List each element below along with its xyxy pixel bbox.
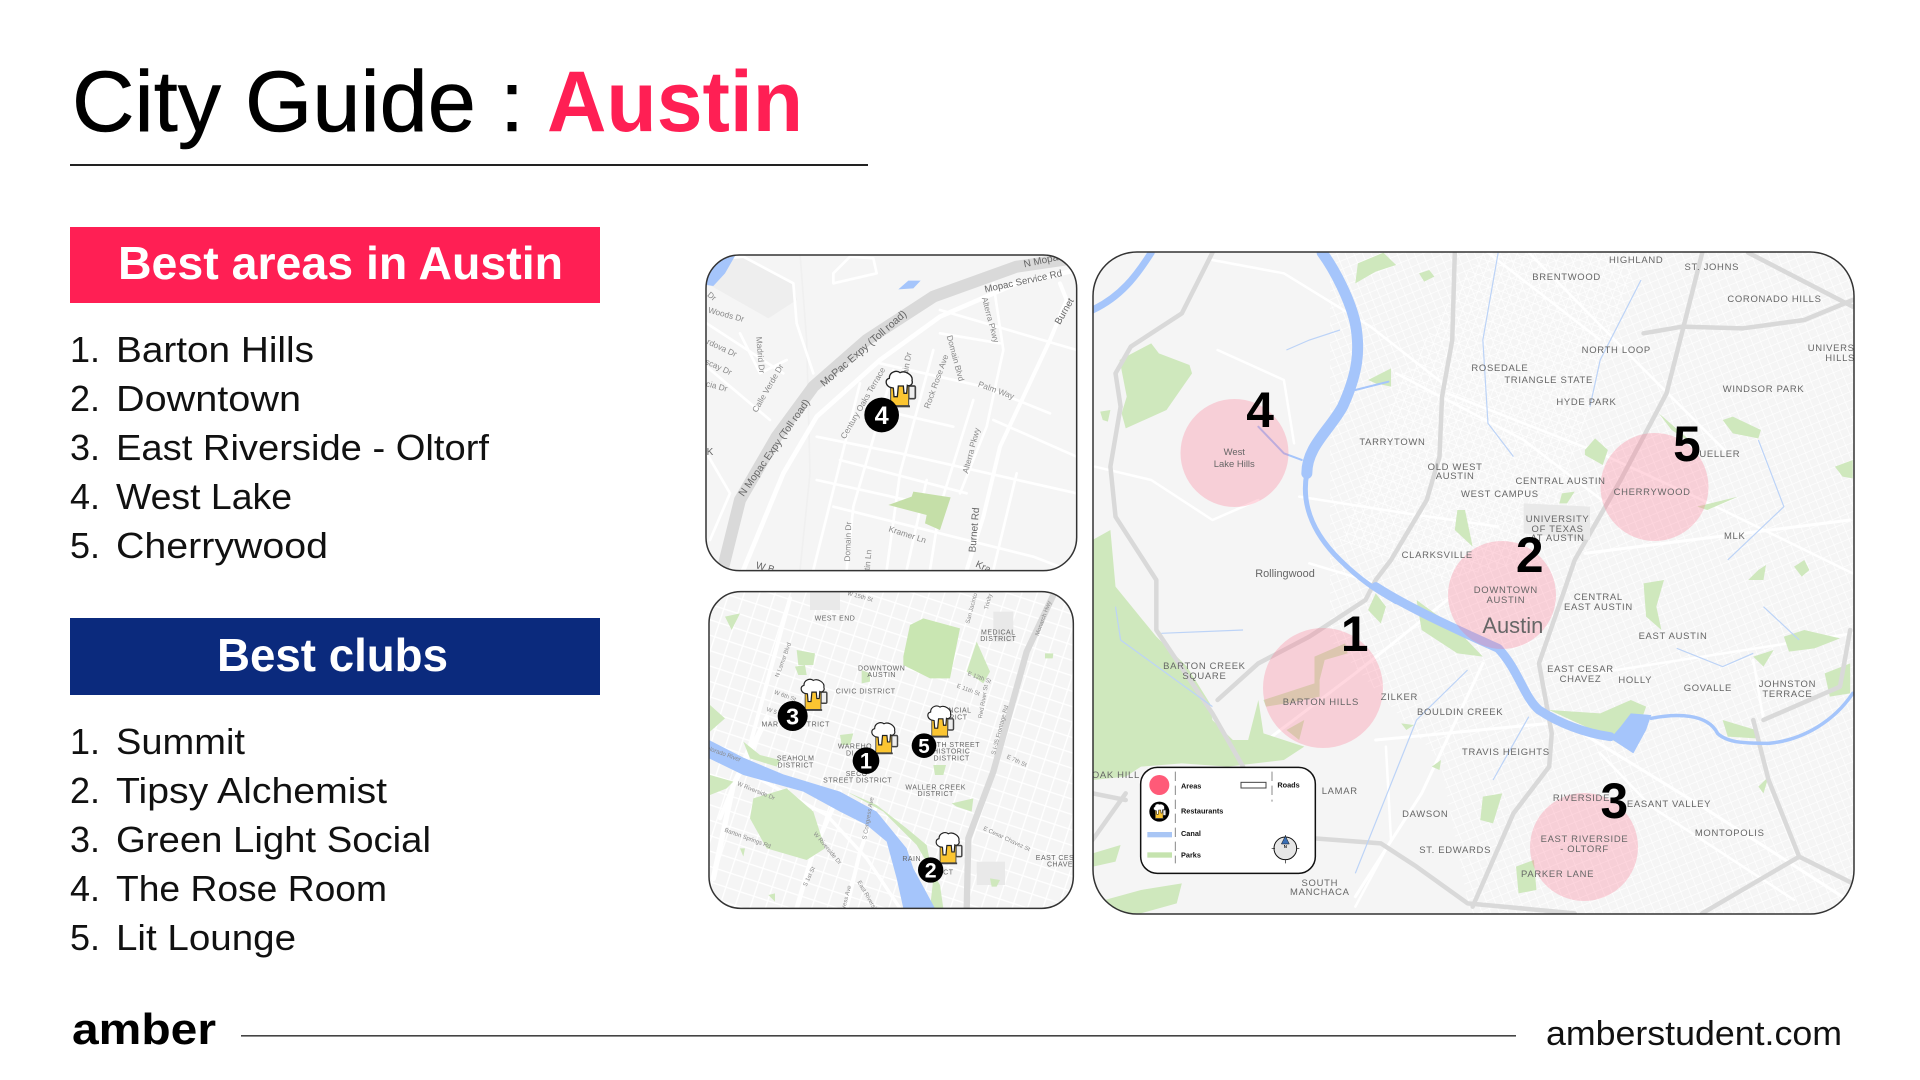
panel: map of downtown clubs: W 15th St (846, 591, 874, 604)
panel: map of downtown clubs: WALLER CREEK (905, 784, 966, 791)
area: Barton Hills (1263, 628, 1383, 748)
legend: areas: Areas (1181, 781, 1201, 790)
panel: map of downtown clubs: WEST END (815, 616, 855, 623)
panel: map of West Lake club: ain Dr (900, 351, 914, 375)
map labels: UNIVERSITY (1526, 514, 1589, 525)
panel: map of downtown clubs: SEAHOLM (777, 756, 814, 763)
panel: map of West Lake club: Century Oaks Terrace (838, 365, 887, 441)
panel: map of downtown clubs: TH STREET (937, 742, 980, 749)
panel: map of West Lake club: Woods Dr (707, 305, 745, 324)
panel: map of downtown clubs: ress Ave (841, 884, 853, 909)
icon: compass (1272, 835, 1299, 863)
map labels: TARRYTOWN (1359, 437, 1426, 448)
map labels: ZILKER (1381, 692, 1418, 703)
panel: map of downtown clubs: W 5 (765, 707, 778, 716)
legend: parks: Parks (1181, 850, 1201, 859)
map labels: BOULDIN CREEK (1417, 707, 1503, 718)
area numbers: 3 (1600, 773, 1628, 829)
panel: map of West Lake club: Domain Dr (842, 521, 853, 562)
panel: map of downtown clubs: NCIAL (948, 708, 972, 715)
title (72, 54, 803, 150)
map labels: SOUTH (1302, 878, 1338, 889)
legend: canal: Canal (1181, 829, 1201, 838)
panel: map of downtown clubs: EAST CES (1036, 855, 1074, 862)
marker: club 5 (912, 733, 936, 758)
title: Austin (547, 54, 803, 150)
panel: map of West Lake club: MoPac Expy (Toll road) (818, 308, 909, 389)
map labels: BARTON HILLS (1283, 697, 1359, 708)
marker: club 1 (853, 747, 879, 774)
map labels: HYDE PARK (1556, 397, 1617, 408)
panel: map of West Lake club: Burnet Rd (967, 507, 982, 553)
list: best areas: 5. (70, 525, 100, 566)
icon: compass: N (1284, 844, 1287, 849)
panel: map of West Lake club: Domain Blvd (945, 334, 967, 383)
panel: map of downtown clubs: CT (943, 869, 954, 876)
marker: club 2: 2 (925, 859, 937, 883)
map labels: ROSEDALE (1471, 363, 1528, 374)
panel: map of West Lake club (704, 251, 1080, 576)
list: best areas: Barton Hills (116, 329, 314, 370)
map labels: MONTOPOLIS (1695, 828, 1765, 839)
list: best areas: East Riverside - Oltorf (116, 427, 490, 468)
panel: map of West Lake club: tin Ln (862, 549, 874, 571)
map labels: TERRACE (1762, 689, 1812, 700)
map labels: MLK (1724, 531, 1745, 542)
map labels: SQUARE (1182, 671, 1226, 682)
panel: map of downtown clubs: Colorado River (702, 744, 741, 764)
map labels: TRAVIS HEIGHTS (1462, 747, 1550, 758)
panel: map of West Lake club: Mopac Service Rd (984, 268, 1063, 295)
list: best clubs: 4. (70, 868, 100, 909)
legend: restaurants (1149, 802, 1223, 822)
list: best clubs: 2. (70, 770, 100, 811)
panel: map of West Lake club: cia Dr (705, 378, 729, 394)
list: best areas: 3. (70, 427, 100, 468)
area numbers: 4 (1246, 382, 1274, 438)
panel: map of downtown clubs: DISTRICT (778, 763, 814, 770)
area numbers: 2 (1516, 527, 1544, 583)
map labels: BARTON CREEK (1163, 661, 1246, 672)
icon: park (888, 492, 951, 530)
list: best clubs: The Rose Room (116, 868, 387, 909)
panel: map of West Lake club: Calle Verde Dr (750, 362, 786, 414)
panel: map of downtown clubs: S I-35 Frontage Rd (991, 705, 1010, 756)
map labels: EAST CESAR (1547, 664, 1614, 675)
marker: club 3: 3 (786, 703, 799, 729)
panel: map of West Lake club: Madrid Dr (754, 336, 767, 374)
list: best areas: Downtown (116, 378, 301, 419)
panel: map of downtown clubs: MAR (761, 722, 779, 729)
map labels: OAK HILL (1092, 770, 1140, 781)
panel: map of West Lake club: Dr (706, 289, 719, 303)
map labels: UNIVERS (1808, 343, 1855, 354)
map labels: LAMAR (1322, 786, 1358, 797)
area numbers: 5 (1673, 416, 1701, 472)
panel: map of downtown clubs: Trinity (984, 593, 994, 610)
panel: map of downtown clubs: AUSTIN (867, 672, 896, 679)
map labels: DOWNTOWN (1474, 585, 1538, 596)
map labels: OF TEXAS (1532, 524, 1584, 535)
map labels: OLD WEST (1428, 462, 1483, 473)
map labels: Rollingwood (1255, 568, 1315, 580)
list: best clubs: 3. (70, 819, 100, 860)
panel: map of West Lake club: Burnet (1053, 296, 1077, 327)
list: best areas: Cherrywood (116, 525, 328, 566)
map labels: EAST RIVERSIDE (1541, 834, 1628, 845)
map labels: HOLLY (1618, 675, 1652, 686)
heading: best areas (70, 227, 600, 303)
map labels: West (1224, 447, 1245, 458)
panel: map of downtown clubs: W 6th St (773, 690, 797, 703)
title: City Guide : (72, 54, 524, 150)
map labels (1092, 255, 1855, 898)
list: best clubs: Tipsy Alchemist (116, 770, 387, 811)
list: best clubs: Green Light Social (116, 819, 431, 860)
panel: map of downtown clubs: W Riverside Dr (736, 781, 776, 802)
marker: club 1: 1 (860, 749, 872, 774)
marker: club 3 (778, 701, 808, 731)
map labels: WINDSOR PARK (1723, 384, 1804, 395)
panel: map of downtown clubs: Red River St (978, 684, 990, 719)
footer url: amberstudent.com (1546, 1015, 1842, 1053)
map labels: ST. EDWARDS (1419, 845, 1491, 856)
panel: map of West Lake club: N Mopac Expy (Toll road) (737, 398, 813, 499)
panel: map of West Lake club: Alterra Pkwy (960, 426, 982, 474)
icon: beer mug 2 (936, 833, 962, 864)
panel: map of downtown clubs: W Riverside Dr (812, 831, 842, 866)
panel: map of downtown clubs: DISTRICT (918, 791, 954, 798)
marker: club 5: 5 (918, 735, 930, 758)
map labels: CENTRAL (1574, 592, 1623, 603)
panel: map of downtown clubs: DI (846, 751, 854, 758)
area numbers: 1 (1341, 606, 1368, 662)
footer brand: amber (72, 1005, 216, 1054)
panel: map of downtown clubs: TRICT (807, 722, 830, 729)
heading: best clubs: Best clubs (217, 629, 448, 681)
map labels: EASANT VALLEY (1627, 799, 1711, 810)
map labels: TRIANGLE STATE (1504, 375, 1593, 386)
map labels: - OLTORF (1560, 844, 1609, 855)
panel: map of downtown clubs: STREET DISTRICT (823, 778, 892, 785)
map labels: HILLS (1825, 353, 1855, 364)
map labels: CENTRAL AUSTIN (1515, 476, 1606, 487)
map labels: JOHNSTON (1759, 679, 1816, 690)
panel: map of West Lake club: Alterra Pkwy (980, 296, 1002, 344)
map labels: MANCHACA (1290, 887, 1350, 898)
legend: areas (1149, 775, 1201, 795)
panel: map of downtown clubs: HISTORIC (933, 749, 970, 756)
panel: map of downtown clubs: Barton Springs Rd (723, 828, 771, 850)
marker: club 4 (864, 398, 899, 432)
panel: map of West Lake club: W B (755, 560, 776, 576)
list: best areas: West Lake (116, 476, 292, 517)
panel: map of downtown clubs: S 1st St (803, 866, 817, 888)
marker: club 2 (918, 857, 943, 883)
map labels: Austin (1482, 613, 1543, 638)
panel: map of downtown clubs (702, 591, 1074, 911)
panel: map of West Lake club: Kramer Ln (887, 524, 928, 545)
area: Downtown Austin (1448, 541, 1556, 649)
list: best clubs: 1. (70, 721, 100, 762)
marker: club 4: 4 (875, 402, 889, 430)
area: West Lake Hills (1180, 399, 1288, 507)
map labels: Lake Hills (1214, 459, 1255, 470)
heading: best areas: Best areas in Austin (118, 237, 563, 289)
map labels: EAST AUSTIN (1564, 602, 1633, 613)
map labels: AUSTIN (1486, 595, 1525, 606)
panel: map of downtown clubs: SECO (846, 771, 868, 778)
legend: canal (1147, 829, 1201, 838)
panel: map of downtown clubs: MEDICAL (981, 629, 1016, 636)
panel: map of downtown clubs: DISTRICT (934, 756, 970, 763)
panel: map of West Lake club: N Mopac (1023, 251, 1064, 270)
panel: map of West Lake club: Palm Way (977, 379, 1016, 401)
panel: map of downtown clubs: N Lamar Blvd (775, 642, 793, 678)
area numbers (1246, 382, 1701, 829)
panel: map of West Lake club: K (707, 447, 714, 458)
panel: map of downtown clubs: S Congress Ave (862, 796, 876, 840)
icon: beer mug 5 (928, 706, 953, 738)
map labels: GOVALLE (1684, 683, 1732, 694)
panel: map of West Lake club: scay Dr (704, 356, 734, 377)
list: best clubs: 5. (70, 917, 100, 958)
list: best clubs: Lit Lounge (116, 917, 296, 958)
map labels: NORTH LOOP (1582, 345, 1651, 356)
panel: map of downtown clubs: E 7th St (1005, 754, 1028, 769)
panel: map of downtown clubs: San Jacinto (965, 592, 979, 624)
panel: map of downtown clubs: E 11th St (956, 684, 981, 698)
legend: roads: Roads (1277, 781, 1300, 790)
list: best areas: 2. (70, 378, 100, 419)
panel: main Austin areas map (1092, 252, 1855, 914)
map labels: PARKER LANE (1521, 869, 1594, 880)
list: best clubs: Summit (116, 721, 245, 762)
panel: map of downtown clubs: RICT (949, 715, 968, 722)
icon: beer mug 1 (872, 723, 897, 754)
map labels: EAST AUSTIN (1639, 631, 1707, 642)
legend: roads (1241, 781, 1300, 790)
list: best areas: 4. (70, 476, 100, 517)
area: East Riverside - Oltorf (1530, 793, 1638, 901)
map labels: AT AUSTIN (1531, 533, 1585, 544)
map labels: CHERRYWOOD (1614, 487, 1691, 498)
panel: map of West Lake club: rdova Dr (705, 336, 739, 359)
map labels: AUSTIN (1436, 471, 1475, 482)
panel: map of West Lake club: Rock Rose Ave (922, 353, 951, 410)
panel: map of downtown clubs: DOWNTOWN (858, 665, 905, 672)
icon: beer mug 4 (886, 371, 915, 407)
panel: map of downtown clubs: Monarch Hwy (1035, 600, 1053, 637)
map labels: WEST CAMPUS (1461, 489, 1539, 500)
map labels: DAWSON (1402, 809, 1448, 820)
map labels: CHAVEZ (1560, 674, 1601, 685)
map labels: BRENTWOOD (1532, 272, 1601, 283)
panel: map of downtown clubs: CHAVE (1047, 862, 1073, 869)
legend (1141, 767, 1315, 873)
list: best areas (70, 329, 490, 566)
legend: parks (1147, 850, 1201, 859)
panel: map of West Lake club: Kra (974, 559, 993, 576)
area: Cherrywood (1600, 433, 1708, 541)
map labels: CORONADO HILLS (1727, 294, 1822, 305)
legend: restaurants: Restaurants (1181, 806, 1223, 815)
panel: map of downtown clubs: DISTRICT (980, 636, 1017, 643)
map labels: ST. JOHNS (1685, 262, 1739, 273)
panel: map of downtown clubs: East Riversi (856, 880, 877, 911)
map labels: HIGHLAND (1609, 255, 1663, 266)
panel: map of downtown clubs: RAIN (902, 856, 921, 863)
map labels: UELLER (1699, 449, 1740, 460)
panel: map of downtown clubs: E Cesar Chavez St (982, 826, 1031, 853)
map labels: CLARKSVILLE (1402, 550, 1473, 561)
heading: best clubs (70, 618, 600, 695)
panel: map of downtown clubs: WAREHO (838, 743, 872, 750)
list: best areas: 1. (70, 329, 100, 370)
icon: beer mug 3 (801, 679, 827, 711)
map labels: RIVERSIDE (1553, 793, 1610, 804)
panel: map of downtown clubs: E 12th St (967, 671, 992, 685)
panel: map of downtown clubs: CIVIC DISTRICT (836, 689, 896, 696)
list: best clubs (70, 721, 431, 958)
